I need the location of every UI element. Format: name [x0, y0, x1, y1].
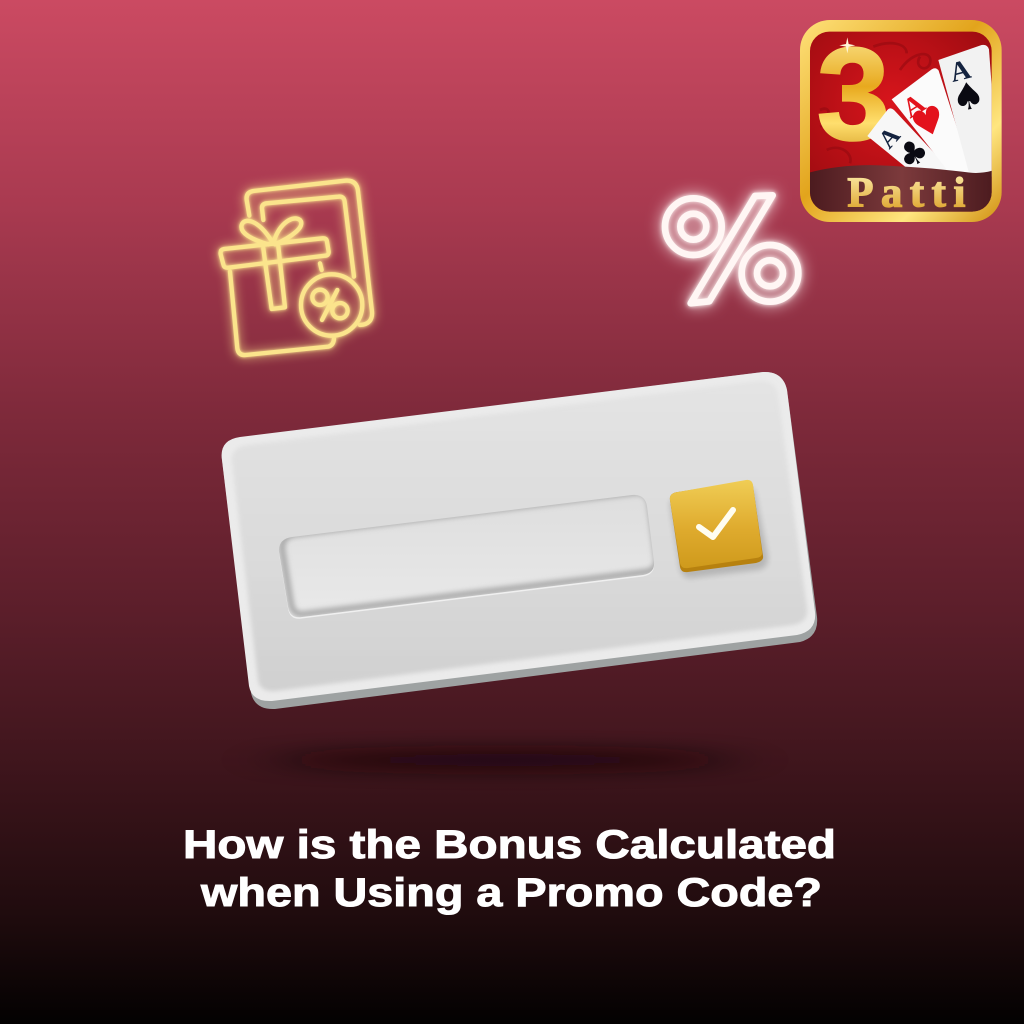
- logo cards and band: ♣: [890, 129, 936, 178]
- title: [183, 823, 836, 915]
- logo cards and band: A: [873, 121, 906, 154]
- logo word Patti: Patti: [847, 170, 965, 217]
- icon: check mark: [699, 510, 733, 537]
- icon: neon white percent sign: [665, 195, 798, 303]
- promo code card: [222, 372, 817, 709]
- card face: [232, 381, 807, 691]
- logo red panel: [810, 32, 992, 212]
- gold confirm button: [670, 480, 768, 578]
- logo numeral 3: 3: [817, 20, 890, 167]
- promo code input field: [279, 492, 657, 619]
- logo cards and band: A: [897, 88, 931, 125]
- logo cards and band: ♠: [949, 72, 988, 120]
- logo sparkle: [839, 37, 855, 53]
- logo cards and band: ♥: [905, 96, 952, 148]
- logo gold frame: [800, 20, 1002, 222]
- title: when Using a Promo Code?: [200, 871, 822, 915]
- card bottom edge: [222, 372, 817, 709]
- card bevel rim: [222, 372, 815, 701]
- card ground shadow: [275, 752, 735, 768]
- logo damask ornament: [820, 43, 930, 163]
- app logo: 3 Patti: [800, 20, 1002, 222]
- logo cards and band: A: [947, 54, 974, 89]
- logo cards and band: [807, 45, 998, 217]
- icon: neon gift box with percent badge: [221, 181, 372, 355]
- title: How is the Bonus Calculated: [183, 823, 836, 867]
